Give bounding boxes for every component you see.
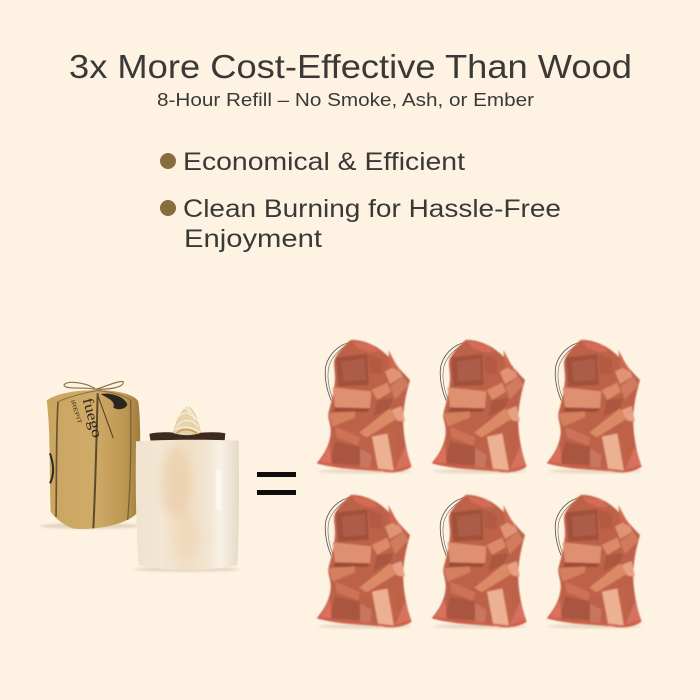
bullet: clean burning — [160, 195, 561, 253]
firewood bag bottom right — [547, 495, 642, 628]
firewood bag bottom middle — [432, 495, 527, 628]
firepit label: IREPIT — [69, 399, 82, 425]
icon: kraft paper wrapped refill — [40, 381, 140, 529]
fibre wick — [171, 401, 201, 436]
twine bow — [64, 381, 123, 389]
logo wordmark: fuego — [79, 396, 105, 440]
bullet: clean burning: Clean Burning for Hassle-Free — [183, 195, 561, 223]
firewood bag top middle — [432, 340, 527, 473]
icon: alabaster fire pit — [133, 401, 240, 572]
firewood bag top right — [547, 340, 642, 473]
subtitle: 8-Hour Refill – No Smoke, Ash, or Ember — [157, 90, 534, 110]
stone body — [136, 440, 239, 570]
title: 3x More Cost-Effective Than Wood — [69, 48, 632, 85]
equals sign — [257, 472, 296, 495]
bullet: economical: Economical & Efficient — [183, 148, 465, 176]
firewood bag bottom left — [317, 495, 412, 628]
dark lid — [149, 432, 225, 441]
firewood bag top left — [317, 340, 412, 473]
bullet: clean burning: Enjoyment — [184, 225, 322, 253]
